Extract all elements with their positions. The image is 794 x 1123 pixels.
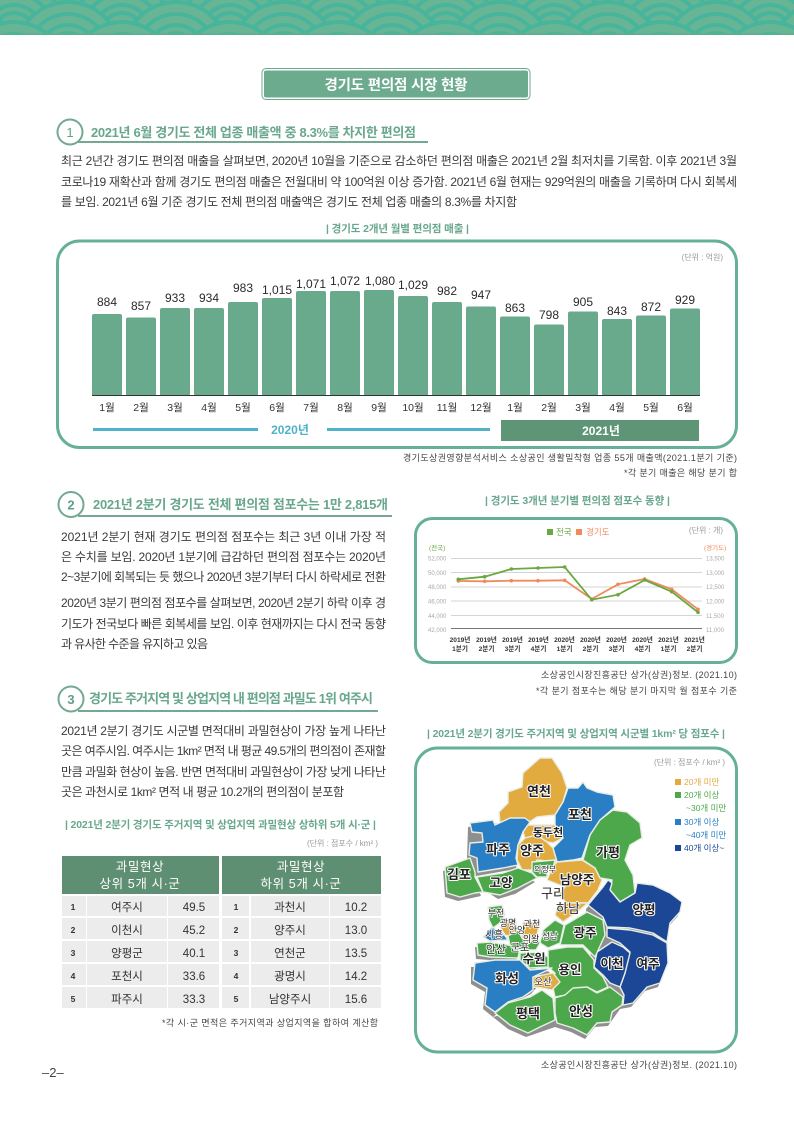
year 2020 bracket: 2020년: [271, 423, 309, 437]
map labels: 양주: [520, 843, 544, 858]
Goyang: [477, 868, 537, 895]
map labels: [447, 784, 660, 1021]
quarter labels: 2분기: [479, 644, 494, 653]
month labels: 9월: [371, 402, 387, 414]
month labels: 4월: [201, 402, 217, 414]
map labels: 동두천: [533, 825, 563, 839]
bar values: 872: [641, 300, 661, 314]
map labels: 의정부: [534, 864, 556, 874]
month labels: 1월: [507, 402, 523, 414]
Gapyeong: [583, 810, 642, 902]
bar values: 1,072: [330, 274, 360, 288]
panel: monthly sales bar chart: (단위 : 억원): [682, 252, 723, 262]
table header: 상위 5개 시·군: [100, 877, 180, 891]
Pocheon: [553, 782, 615, 862]
axis titles and tick labels: 44,000: [428, 614, 447, 620]
panel: monthly sales bar chart: [58, 241, 736, 448]
Hwaseong: [473, 960, 552, 1012]
quarter labels: 3분기: [505, 644, 520, 653]
map labels: 하남: [556, 901, 580, 916]
axis titles and tick labels: 13,500: [706, 556, 725, 562]
section 3 heading: 3: [67, 692, 75, 707]
line chart source: *각 분기 점포수는 해당 분기 마지막 월 점포수 기준: [536, 685, 737, 696]
map labels: 가평: [596, 845, 620, 860]
panel: regional store density map: (단위 : 점포수 / km² ): [654, 757, 725, 767]
section 2 body text: 2020년 3분기 편의점 점포수를 살펴보면, 2020년 2분기 하락 이후 경: [61, 596, 386, 610]
section 3 body text: [61, 724, 386, 799]
quarter labels: 2019년: [528, 635, 549, 644]
section 2 heading: [58, 492, 392, 517]
table values: 여주시: [111, 901, 143, 914]
Yongin: [548, 947, 608, 997]
table values: 14.2: [345, 971, 367, 983]
section 1 heading: 2021년 6월 경기도 전체 업종 매출액 중 8.3%를 차지한 편의점: [91, 125, 416, 140]
title: 경기도 편의점 시장 현황: [324, 77, 468, 94]
bar chart source: [403, 452, 737, 478]
month labels: 1월: [99, 402, 115, 414]
table header: 하위 5개 시·군: [261, 877, 341, 891]
bar values: 857: [131, 299, 151, 313]
table values: 남양주시: [269, 993, 311, 1006]
axis titles and tick labels: 42,000: [428, 628, 447, 634]
section 2 heading: 2021년 2분기 경기도 전체 편의점 점포수는 1만 2,815개: [93, 497, 388, 512]
bar values: 863: [505, 301, 525, 315]
table header: [62, 856, 381, 894]
table values: 2: [71, 925, 76, 935]
map labels: 과천: [524, 919, 540, 929]
month labels: 6월: [269, 402, 285, 414]
quarter labels: 2020년: [606, 635, 627, 644]
bar values: 884: [97, 295, 117, 309]
Dongducheon: [523, 825, 563, 843]
year 2021 bar: [501, 420, 699, 441]
table values: 10.2: [345, 902, 367, 914]
map labels: 평택: [516, 1006, 540, 1021]
Icheon: [594, 942, 630, 987]
panel: regional store density map: [416, 748, 736, 1052]
table values: 2: [234, 925, 239, 935]
Bucheon: [488, 905, 505, 928]
map labels: 고양: [489, 876, 513, 890]
axis titles and tick labels: (경기도): [704, 543, 726, 552]
Pyeongtaek: [495, 990, 555, 1033]
month labels: [99, 402, 693, 414]
quarter labels: 4분기: [635, 644, 650, 653]
table unit: (단위 : 점포수 / km² ): [307, 838, 378, 848]
Siheung: [483, 927, 508, 941]
line chart heading: | 경기도 3개년 분기별 편의점 점포수 동향 |: [485, 494, 670, 507]
table values: 40.1: [183, 948, 205, 960]
map labels: 안성: [569, 1004, 593, 1019]
quarter labels: 2019년: [502, 635, 523, 644]
map legend: 20개 미만: [684, 777, 719, 787]
section 1 body text: 를 보임. 2021년 6월 기준 경기도 전체 편의점 매출액은 경기도 전체 업종 매출의 8.3%를 차지함: [61, 195, 517, 209]
month labels: 12월: [470, 402, 492, 414]
bar values: 1,080: [365, 274, 395, 288]
title: [262, 68, 530, 100]
month labels: 5월: [643, 402, 659, 414]
section 1 heading: [58, 120, 428, 144]
table values: 과천시: [274, 900, 306, 914]
header wave band: [0, 0, 794, 35]
bar values: 934: [199, 291, 219, 305]
map labels: 수원: [522, 952, 546, 966]
map drop shadow: [443, 822, 680, 1039]
bar values: 1,029: [398, 278, 428, 292]
table values: 3: [71, 948, 76, 958]
bar chart source: 경기도상권영향분석서비스 소상공인 생활밀착형 업종 55개 매출액(2021.1분기 기준): [403, 452, 737, 463]
panel: store count line chart: [416, 518, 736, 662]
table values: 1: [234, 902, 239, 912]
section 1 body text: 코로나19 재확산과 함께 경기도 편의점 매출은 전월대비 약 100억원 이상 증가함. 2021년 6월 현재는 929억원의 매출을 기록하며 다시 회복세: [61, 174, 737, 189]
table heading: | 2021년 2분기 경기도 주거지역 및 상업지역 과밀현상 상하위 5개 시·군 |: [65, 818, 376, 831]
quarter labels: 1분기: [452, 644, 468, 653]
section 2 heading: 2: [67, 498, 75, 512]
month labels: 8월: [337, 402, 353, 414]
section 1 body text: [61, 154, 737, 209]
legend: [547, 527, 610, 537]
month labels: 4월: [609, 402, 625, 414]
table cells: [62, 896, 381, 1008]
map labels: 광주: [573, 926, 597, 940]
table values: [71, 900, 367, 1006]
month labels: 3월: [575, 402, 591, 414]
table values: 양주시: [274, 924, 306, 937]
bar values: 947: [471, 288, 491, 302]
map heading: | 2021년 2분기 경기도 주거지역 및 상업지역 시군별 1km² 당 점포수 |: [427, 727, 725, 740]
month labels: 10월: [402, 402, 424, 414]
table values: 파주시: [111, 993, 143, 1006]
table values: 연천군: [274, 946, 306, 960]
map labels: 광명: [500, 917, 516, 928]
table: density top and bottom five: [62, 856, 381, 1008]
legend: 전국: [556, 527, 572, 537]
map legend: ~40개 미만: [686, 830, 726, 840]
table values: 13.5: [345, 948, 367, 960]
table values: 양평군: [111, 947, 143, 960]
Yangpyeong: [588, 880, 682, 942]
Hanam: [555, 903, 588, 922]
Gwacheon: [522, 922, 540, 944]
axis titles and tick labels: 12,000: [706, 600, 725, 606]
map labels: 용인: [558, 963, 582, 977]
table values: 49.5: [183, 902, 205, 914]
section 3 heading: 경기도 주거지역 및 상업지역 내 편의점 과밀도 1위 여주시: [89, 691, 373, 706]
Paju: [469, 818, 530, 872]
table header: 과밀현상: [116, 860, 164, 874]
bar values: 983: [233, 281, 253, 295]
map labels: 남양주: [560, 873, 594, 887]
line chart source: [536, 669, 737, 696]
axis titles and tick labels: 50,000: [428, 571, 447, 577]
month labels: 5월: [235, 402, 251, 414]
section 2 body text: [61, 530, 386, 651]
map labels: 시흥: [485, 928, 503, 941]
month labels: 2월: [133, 402, 149, 414]
map legend: [675, 777, 726, 853]
map labels: 의왕: [523, 934, 539, 944]
axis titles and tick labels: 11,000: [706, 628, 725, 634]
map legend: 40개 이상~: [684, 843, 724, 853]
table values: 45.2: [183, 925, 205, 937]
section 3 body text: 곳은 여주시임. 여주시는 1km² 면적 내 평균 49.5개의 편의점이 존재할: [61, 744, 386, 758]
map labels: 부천: [488, 908, 504, 918]
Yeoju: [607, 928, 668, 1005]
Gwangmyeong: [500, 918, 518, 937]
map labels: 안산: [486, 943, 506, 956]
quarter labels: 1분기: [557, 644, 572, 653]
quarter labels: 2019년: [476, 635, 497, 644]
quarter labels: 2020년: [632, 635, 653, 644]
bar values: 798: [539, 308, 559, 322]
bar values: 1,071: [296, 277, 326, 291]
table values: 5: [71, 994, 76, 1004]
Namyangju: [547, 860, 602, 903]
bar values: 905: [573, 295, 593, 309]
month labels: 3월: [167, 402, 183, 414]
Seongnam: [540, 920, 564, 948]
axis titles and tick labels: 52,000: [428, 556, 447, 562]
bar values: [97, 274, 695, 322]
quarter labels: 2분기: [687, 644, 702, 653]
table values: 33.3: [183, 994, 205, 1006]
line chart source: 소상공인시장진흥공단 상가(상권)정보. (2021.10): [541, 669, 737, 680]
section 2 body text: 은 수치를 보임. 2020년 1분기에 급감하던 편의점 점포수는 2020년: [61, 550, 386, 564]
Uijeongbu: [532, 860, 555, 877]
map labels: 구리: [541, 886, 565, 901]
axis titles and tick labels: [428, 543, 726, 634]
Gwangju: [560, 912, 605, 957]
month labels: 2월: [541, 402, 557, 414]
map regions: [443, 758, 682, 1039]
map labels: 오산: [534, 977, 552, 988]
bar chart heading: | 경기도 2개년 월별 편의점 매출 |: [326, 222, 469, 235]
quarter labels: 2021년: [658, 635, 679, 644]
map labels: 양평: [632, 903, 656, 917]
table values: 광명시: [274, 970, 306, 983]
section 1 heading: 1: [66, 125, 74, 140]
map labels: 이천: [600, 957, 624, 971]
bars: [92, 290, 700, 396]
table values: 이천시: [111, 923, 143, 937]
panel: store count line chart: (단위 : 개): [689, 525, 723, 535]
quarter labels: [450, 635, 705, 653]
page number: –2–: [42, 1065, 64, 1080]
axis titles and tick labels: 13,000: [706, 571, 725, 577]
quarter labels: 2분기: [583, 644, 598, 653]
section 3 heading: [58, 686, 378, 712]
table values: 4: [234, 971, 239, 981]
table values: 15.6: [345, 994, 367, 1006]
quarter labels: 1분기: [661, 644, 676, 653]
series: Gyeonggi: [456, 577, 700, 611]
map labels: 김포: [447, 867, 471, 882]
table note: *각 시·군 면적은 주거지역과 상업지역을 합하여 계산함: [162, 1017, 378, 1028]
axis titles and tick labels: (전국): [429, 543, 445, 552]
Gimpo: [445, 858, 483, 897]
table values: 33.6: [183, 971, 205, 983]
map legend: 20개 이상: [684, 790, 719, 800]
axis titles and tick labels: 48,000: [428, 585, 447, 591]
section 3 body text: 곳은 과천시로 1km² 면적 내 평균 10.2개의 편의점이 분포함: [61, 784, 344, 799]
bar values: 933: [165, 291, 185, 305]
month labels: 11월: [437, 402, 457, 414]
quarter labels: 2020년: [580, 635, 601, 644]
table values: 13.0: [345, 925, 367, 937]
bar values: 843: [607, 304, 627, 318]
Yangju: [517, 835, 557, 870]
section 2 body text: 기도가 전국보다 빠른 회복세를 보임. 이후 현재까지는 다시 전국 동향: [61, 617, 386, 631]
axis titles and tick labels: 46,000: [428, 600, 447, 606]
map labels: 파주: [486, 842, 510, 857]
table values: 3: [234, 948, 239, 958]
quarter labels: 2019년: [450, 635, 470, 644]
Yeoncheon: [499, 758, 567, 825]
map source: 소상공인시장진흥공단 상가(상권)정보. (2021.10): [541, 1059, 737, 1070]
section 1 body text: 최근 2년간 경기도 편의점 매출을 살펴보면, 2020년 10월을 기준으로 감소하던 편의점 매출은 2021년 2월 최저치를 기록함. 이후 2021년 3월: [61, 154, 737, 168]
axis titles and tick labels: 11,500: [706, 614, 725, 620]
year 2021 bar: 2021년: [582, 424, 620, 438]
section 3 body text: 만큼 과밀화 현상이 높음. 반면 면적대비 과밀현상이 가장 낮게 나타난: [61, 765, 386, 779]
map labels: 안양: [509, 925, 525, 935]
map labels: 화성: [495, 971, 519, 986]
quarter labels: 3분기: [609, 644, 624, 653]
quarter labels: 4분기: [531, 644, 546, 653]
map labels: 여주: [636, 957, 660, 971]
table values: 4: [71, 971, 76, 981]
section 2 body text: 2~3분기에 회복되는 듯 했으나 2020년 3분기부터 다시 하락세로 전환: [61, 570, 386, 584]
month labels: 7월: [303, 402, 319, 414]
map labels: 성남: [542, 931, 558, 941]
Suwon: [520, 952, 548, 968]
table header: 과밀현상: [277, 860, 325, 874]
quarter labels: 2020년: [554, 635, 575, 644]
map labels: 군포: [511, 942, 529, 954]
section 2 body text: 2021년 2분기 현재 경기도 편의점 점포수는 최근 3년 이내 가장 적: [61, 530, 386, 544]
bar values: 1,015: [262, 283, 292, 297]
Ansan: [477, 942, 520, 958]
map labels: 포천: [568, 807, 592, 822]
map legend: 30개 이상: [684, 817, 719, 827]
Anyang and Uiwang: [508, 930, 540, 950]
bar chart source: *각 분기 매출은 해당 분기 합: [624, 467, 737, 478]
table values: 1: [71, 902, 76, 912]
axis titles and tick labels: 12,500: [706, 585, 725, 591]
Osan: [533, 973, 560, 990]
series: national: [456, 565, 700, 614]
table values: 5: [234, 994, 239, 1004]
bar values: 929: [675, 293, 695, 307]
bar values: 982: [437, 284, 457, 298]
Anseong: [555, 987, 623, 1035]
section 2 body text: 과 유사한 수준을 유지하고 있음: [61, 637, 208, 651]
month labels: 6월: [677, 402, 693, 414]
legend: 경기도: [586, 527, 610, 537]
map labels: 연천: [527, 784, 551, 799]
section 3 body text: 2021년 2분기 경기도 시군별 면적대비 과밀현상이 가장 높게 나타난: [61, 724, 386, 738]
table values: 포천시: [111, 969, 143, 983]
quarter labels: 2021년: [684, 635, 705, 644]
map legend: ~30개 미만: [686, 803, 726, 813]
